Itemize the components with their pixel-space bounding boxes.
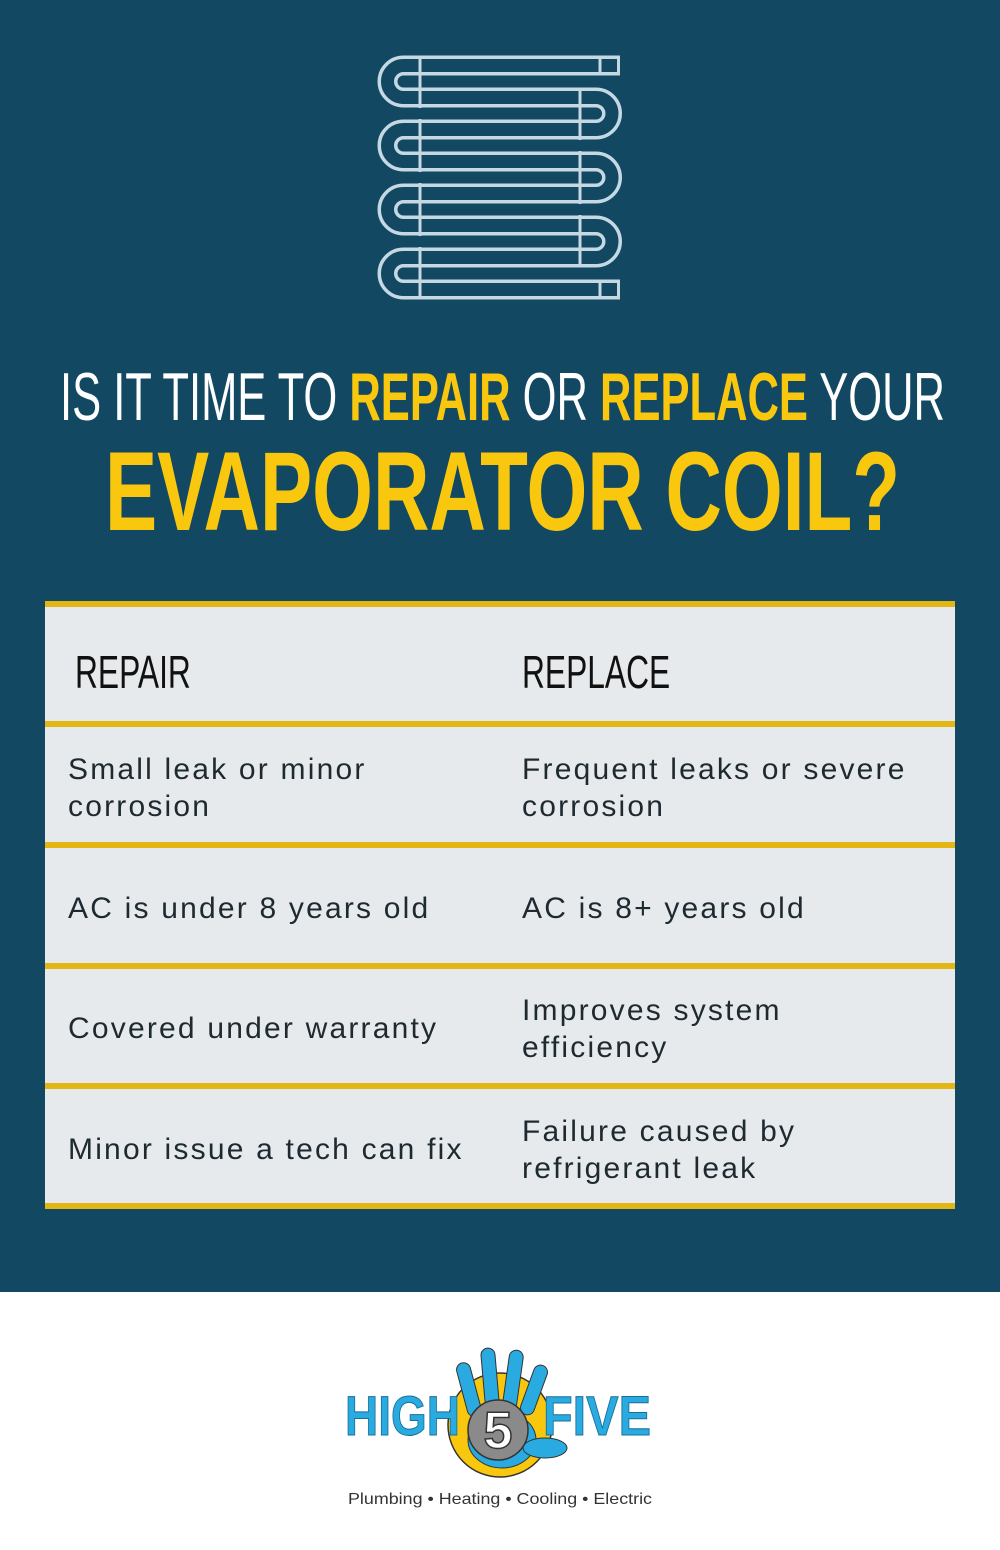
logo: High Five	[345, 1348, 652, 1508]
title line 1: IS IT TIME TO REPAIR OR REPLACE YOUR	[60, 359, 945, 435]
logo icon: hand and circle: 5	[484, 1402, 512, 1460]
row 2 repair: AC is under 8 years old	[68, 892, 430, 925]
header: replace: REPLACE	[522, 646, 670, 698]
row 1 repair: corrosion	[68, 790, 211, 823]
title	[60, 359, 945, 550]
row 1 repair	[68, 753, 367, 823]
row 1 replace: Frequent leaks or severe	[522, 753, 907, 786]
row 4 replace	[522, 1115, 796, 1185]
row 2 replace: AC is 8+ years old	[522, 892, 806, 925]
row 1 replace: corrosion	[522, 790, 665, 823]
header: repair: REPAIR	[75, 646, 191, 698]
row 4 replace: refrigerant leak	[522, 1152, 757, 1185]
row 1 repair: Small leak or minor	[68, 753, 367, 786]
table: repair vs replace	[45, 601, 955, 1209]
row 3 replace: Improves system	[522, 994, 782, 1027]
logo: High Five: FIVE	[543, 1384, 651, 1447]
logo wordmark: HIGH	[345, 1384, 460, 1447]
icon: evaporator coil	[378, 56, 622, 300]
logo tagline: Plumbing • Heating • Cooling • Electric	[348, 1491, 652, 1508]
row 4 replace: Failure caused by	[522, 1115, 796, 1148]
logo icon: hand and circle	[448, 1348, 567, 1477]
row 1 replace	[522, 753, 907, 823]
row 3 replace	[522, 994, 782, 1064]
row 3 repair: Covered under warranty	[68, 1012, 438, 1045]
row 4 repair: Minor issue a tech can fix	[68, 1133, 464, 1166]
row 3 replace: efficiency	[522, 1031, 669, 1064]
